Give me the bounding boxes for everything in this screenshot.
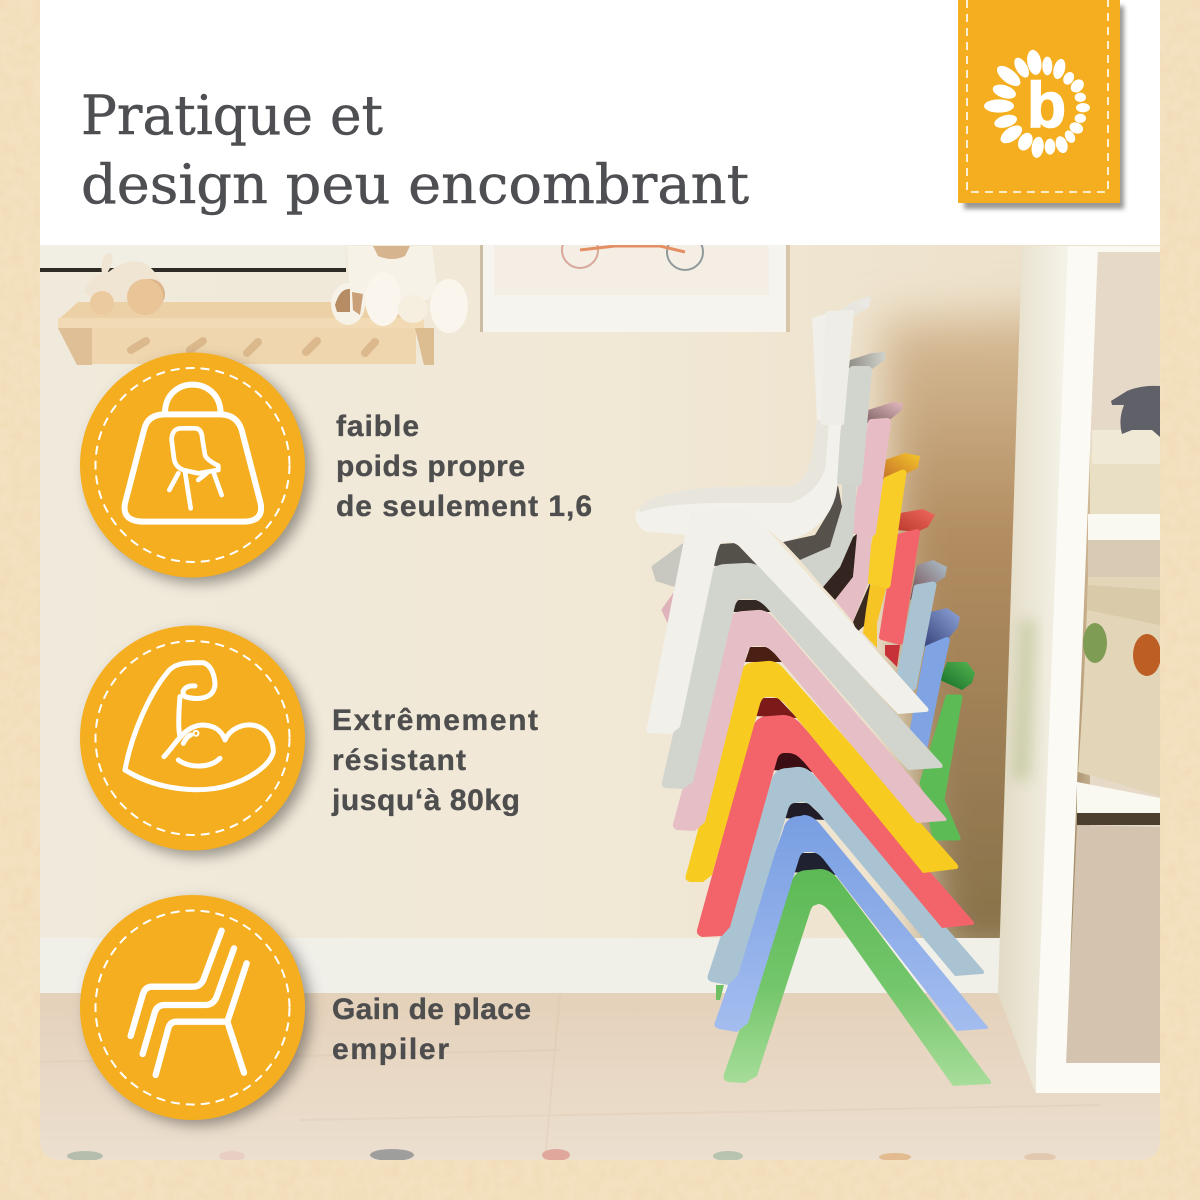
logo: sunflower: b (1027, 69, 1066, 141)
icon: weight bag with chair (125, 385, 261, 522)
fabric storage box (1066, 825, 1160, 1063)
logo: sunflower (984, 49, 1090, 159)
chair: yellow (686, 453, 958, 882)
chair: gray (653, 352, 943, 789)
wooden wall shelf (58, 302, 434, 365)
plush toy (331, 246, 468, 333)
chair: pink (663, 402, 947, 831)
feature text: strength (331, 704, 538, 817)
feature text: weight: de seulement 1,6 (336, 490, 592, 523)
stack of chairs (635, 297, 991, 1086)
room photo background (40, 232, 1161, 1161)
title (81, 84, 749, 216)
logo tag (958, 0, 1124, 209)
feature text: strength: résistant (332, 744, 466, 777)
feature text: weight: poids propre (336, 450, 525, 483)
baseboard (40, 938, 1000, 994)
feature text: stacking: Gain de place (332, 993, 531, 1026)
chair: white (635, 297, 929, 734)
icon: stacked chairs (131, 931, 247, 1075)
chair: red (697, 509, 974, 937)
feature text: weight (336, 410, 592, 523)
green pompom (1083, 623, 1107, 663)
chair: light blue (708, 560, 984, 985)
wooden rabbit toy (84, 253, 165, 315)
icon: flexed arm (125, 663, 273, 790)
front edge (1036, 246, 1098, 1065)
feature text: stacking (332, 993, 531, 1066)
side panel (998, 246, 1070, 1094)
chair: blue (714, 608, 988, 1032)
wooden floor (40, 993, 1160, 1160)
bookcase (998, 246, 1161, 1094)
woven basket (1078, 577, 1161, 796)
box with lid on shelf (1092, 430, 1160, 464)
feature text: strength: jusqu‘à 80kg (331, 784, 520, 817)
rug tufts (67, 1149, 1056, 1161)
header white band (40, 0, 1160, 246)
title: design peu encombrant (81, 153, 749, 216)
left framed picture (40, 245, 346, 272)
feature badge: low weight (80, 352, 311, 583)
title: Pratique et (81, 84, 383, 147)
feature text: weight: faible (336, 410, 419, 443)
feature text: stacking: empiler (332, 1033, 449, 1066)
coat pegs (131, 341, 375, 353)
stuffed elephant (1111, 386, 1160, 437)
feature badge: stacking (80, 895, 311, 1125)
orange pompom (1133, 634, 1161, 676)
center framed picture with bicycle (480, 245, 790, 332)
feature text: strength: Extrêmement (332, 704, 538, 737)
feature badge: strength (80, 626, 311, 856)
chair: green (716, 662, 991, 1086)
